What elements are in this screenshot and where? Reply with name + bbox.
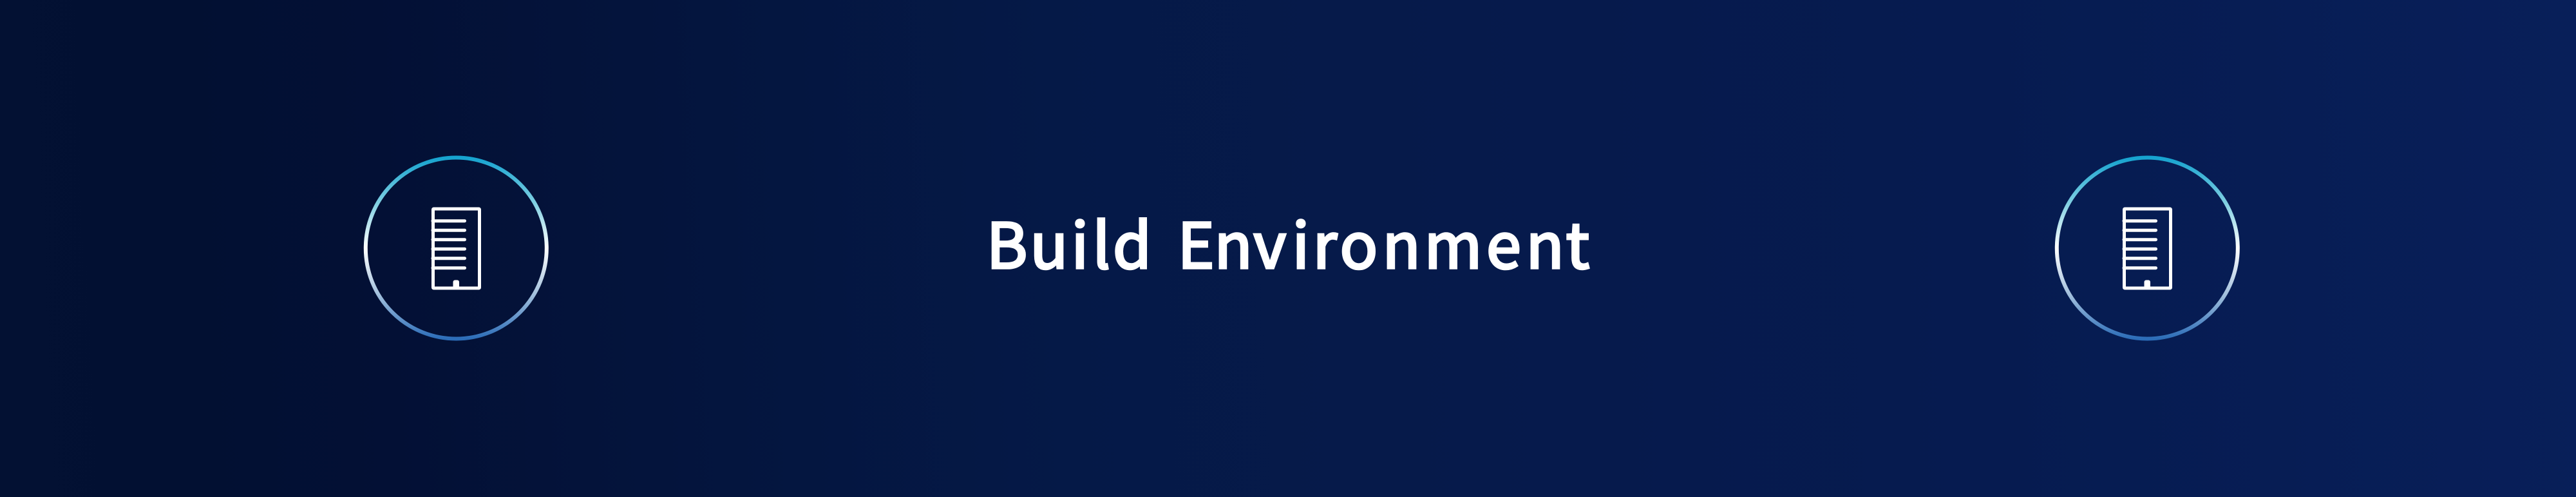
icon: left building in gradient ring	[366, 157, 547, 339]
title: Build Environment	[987, 195, 1589, 286]
icon: right building in gradient ring	[2057, 157, 2238, 339]
